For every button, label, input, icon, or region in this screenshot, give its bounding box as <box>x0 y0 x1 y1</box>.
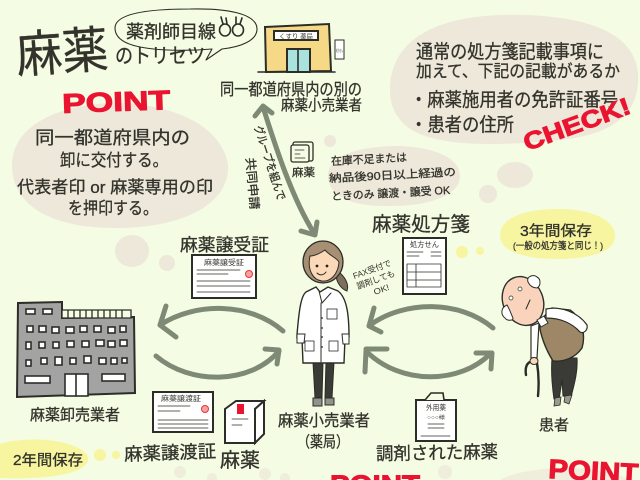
callout: stock shortage: ときのみ 譲渡・譲受 OK <box>331 183 451 203</box>
icon: narcotic box <box>225 401 264 443</box>
callout: stock shortage <box>328 146 460 206</box>
text: point body: 同一都道府県内の <box>35 128 190 148</box>
icon: pharmacy store <box>258 24 344 72</box>
panel: point left <box>12 85 228 228</box>
title: 麻薬 <box>14 22 110 84</box>
text: check body: 通常の処方箋記載事項に <box>416 41 604 63</box>
speech bubble: pharmacist viewpoint: 薬剤師目線 <box>126 22 216 42</box>
icon: transfer certificate <box>153 392 213 432</box>
text: check body: 加えて、下記の記載があるか <box>416 62 620 81</box>
icon: transfer certificate: 麻薬譲渡証 <box>161 393 202 403</box>
icon: medicine bag <box>416 393 456 441</box>
speech bubble: pharmacist viewpoint <box>115 9 257 60</box>
heading: check: CHECK! <box>520 93 634 157</box>
callout: keep 3 years <box>456 209 615 259</box>
icon: narcotic document: 麻薬 <box>292 166 315 179</box>
text: wholesaler label: 麻薬卸売業者 <box>30 406 120 424</box>
text: point body: を押印する。 <box>68 199 158 218</box>
icon: medicine bag: 外用薬 <box>426 402 446 412</box>
text: FAX note: FAX受付で <box>352 258 393 281</box>
text: FAX note <box>352 258 400 302</box>
heading: point: POINT <box>62 85 171 119</box>
text: group application: グループを組んで <box>251 124 289 202</box>
callout: keep 2 years: 2年間保存 <box>13 452 83 469</box>
text: retailer label: 麻薬小売業者 <box>278 412 370 430</box>
text: other retailer label <box>220 80 362 114</box>
icon: pharmacy store: 処方せん <box>336 47 343 53</box>
callout: stock shortage: 納品後90日以上経過の <box>329 165 456 185</box>
text: point body <box>17 128 213 218</box>
icon: prescription sheet <box>403 238 446 294</box>
icon: medicine bag: ○○○様 <box>427 414 445 421</box>
panel: check <box>390 15 638 157</box>
title <box>14 22 205 84</box>
icon: pharmacist <box>297 241 349 406</box>
heading: narcotic prescription: 麻薬処方箋 <box>372 213 470 236</box>
icon: receipt certificate: 麻薬譲受証 <box>204 257 245 267</box>
text: other retailer label: 麻薬小売業者 <box>281 97 362 114</box>
text: dispensed narcotic label: 調剤された麻薬 <box>376 442 498 464</box>
text: transfer certificate label: 麻薬譲渡証 <box>124 441 216 465</box>
text: other retailer label: 同一都道府県内の別の <box>220 80 362 99</box>
callout: keep 3 years: (一般の処方箋と同じ！) <box>513 240 603 252</box>
text: check body: ・患者の住所 <box>410 114 514 136</box>
arrows: wholesaler and retailer <box>156 306 283 377</box>
arrow: between retailers <box>255 106 317 235</box>
icon: elderly patient <box>495 270 587 406</box>
decorative bottom blobs <box>174 465 640 480</box>
text: group application: 共同申請 <box>243 157 261 210</box>
text: point body: 卸に交付する。 <box>60 151 168 170</box>
text: retailer label <box>278 412 370 451</box>
icon: pharmacy store: くすり 薬局 <box>279 32 313 40</box>
icon: receipt certificate <box>192 255 256 298</box>
text: patient label: 患者 <box>539 417 569 434</box>
icon: wholesaler building <box>17 302 135 397</box>
arrows: retailer and patient <box>365 307 493 377</box>
text: FAX note: 調剤しても <box>355 268 396 291</box>
callout: stock shortage: 在庫不足または <box>331 150 407 168</box>
icon: narcotic document <box>291 142 315 179</box>
text: check body: ・麻薬施用者の免許証番号 <box>410 89 618 111</box>
callout: keep 2 years <box>0 440 120 478</box>
icon: prescription sheet: 処方せん <box>410 239 439 249</box>
text: point body: 代表者印 or 麻薬専用の印 <box>17 178 213 197</box>
text: retailer label: （薬局） <box>297 433 349 451</box>
title: のトリセツ <box>115 45 205 68</box>
decorative circles <box>115 135 533 271</box>
heading: transfer receipt: 麻薬譲受証 <box>180 235 269 255</box>
callout: keep 3 years: 3年間保存 <box>520 223 592 240</box>
text: FAX note: OK! <box>372 282 391 297</box>
text: check body <box>410 41 620 136</box>
text: narcotic label: 麻薬 <box>220 449 260 472</box>
